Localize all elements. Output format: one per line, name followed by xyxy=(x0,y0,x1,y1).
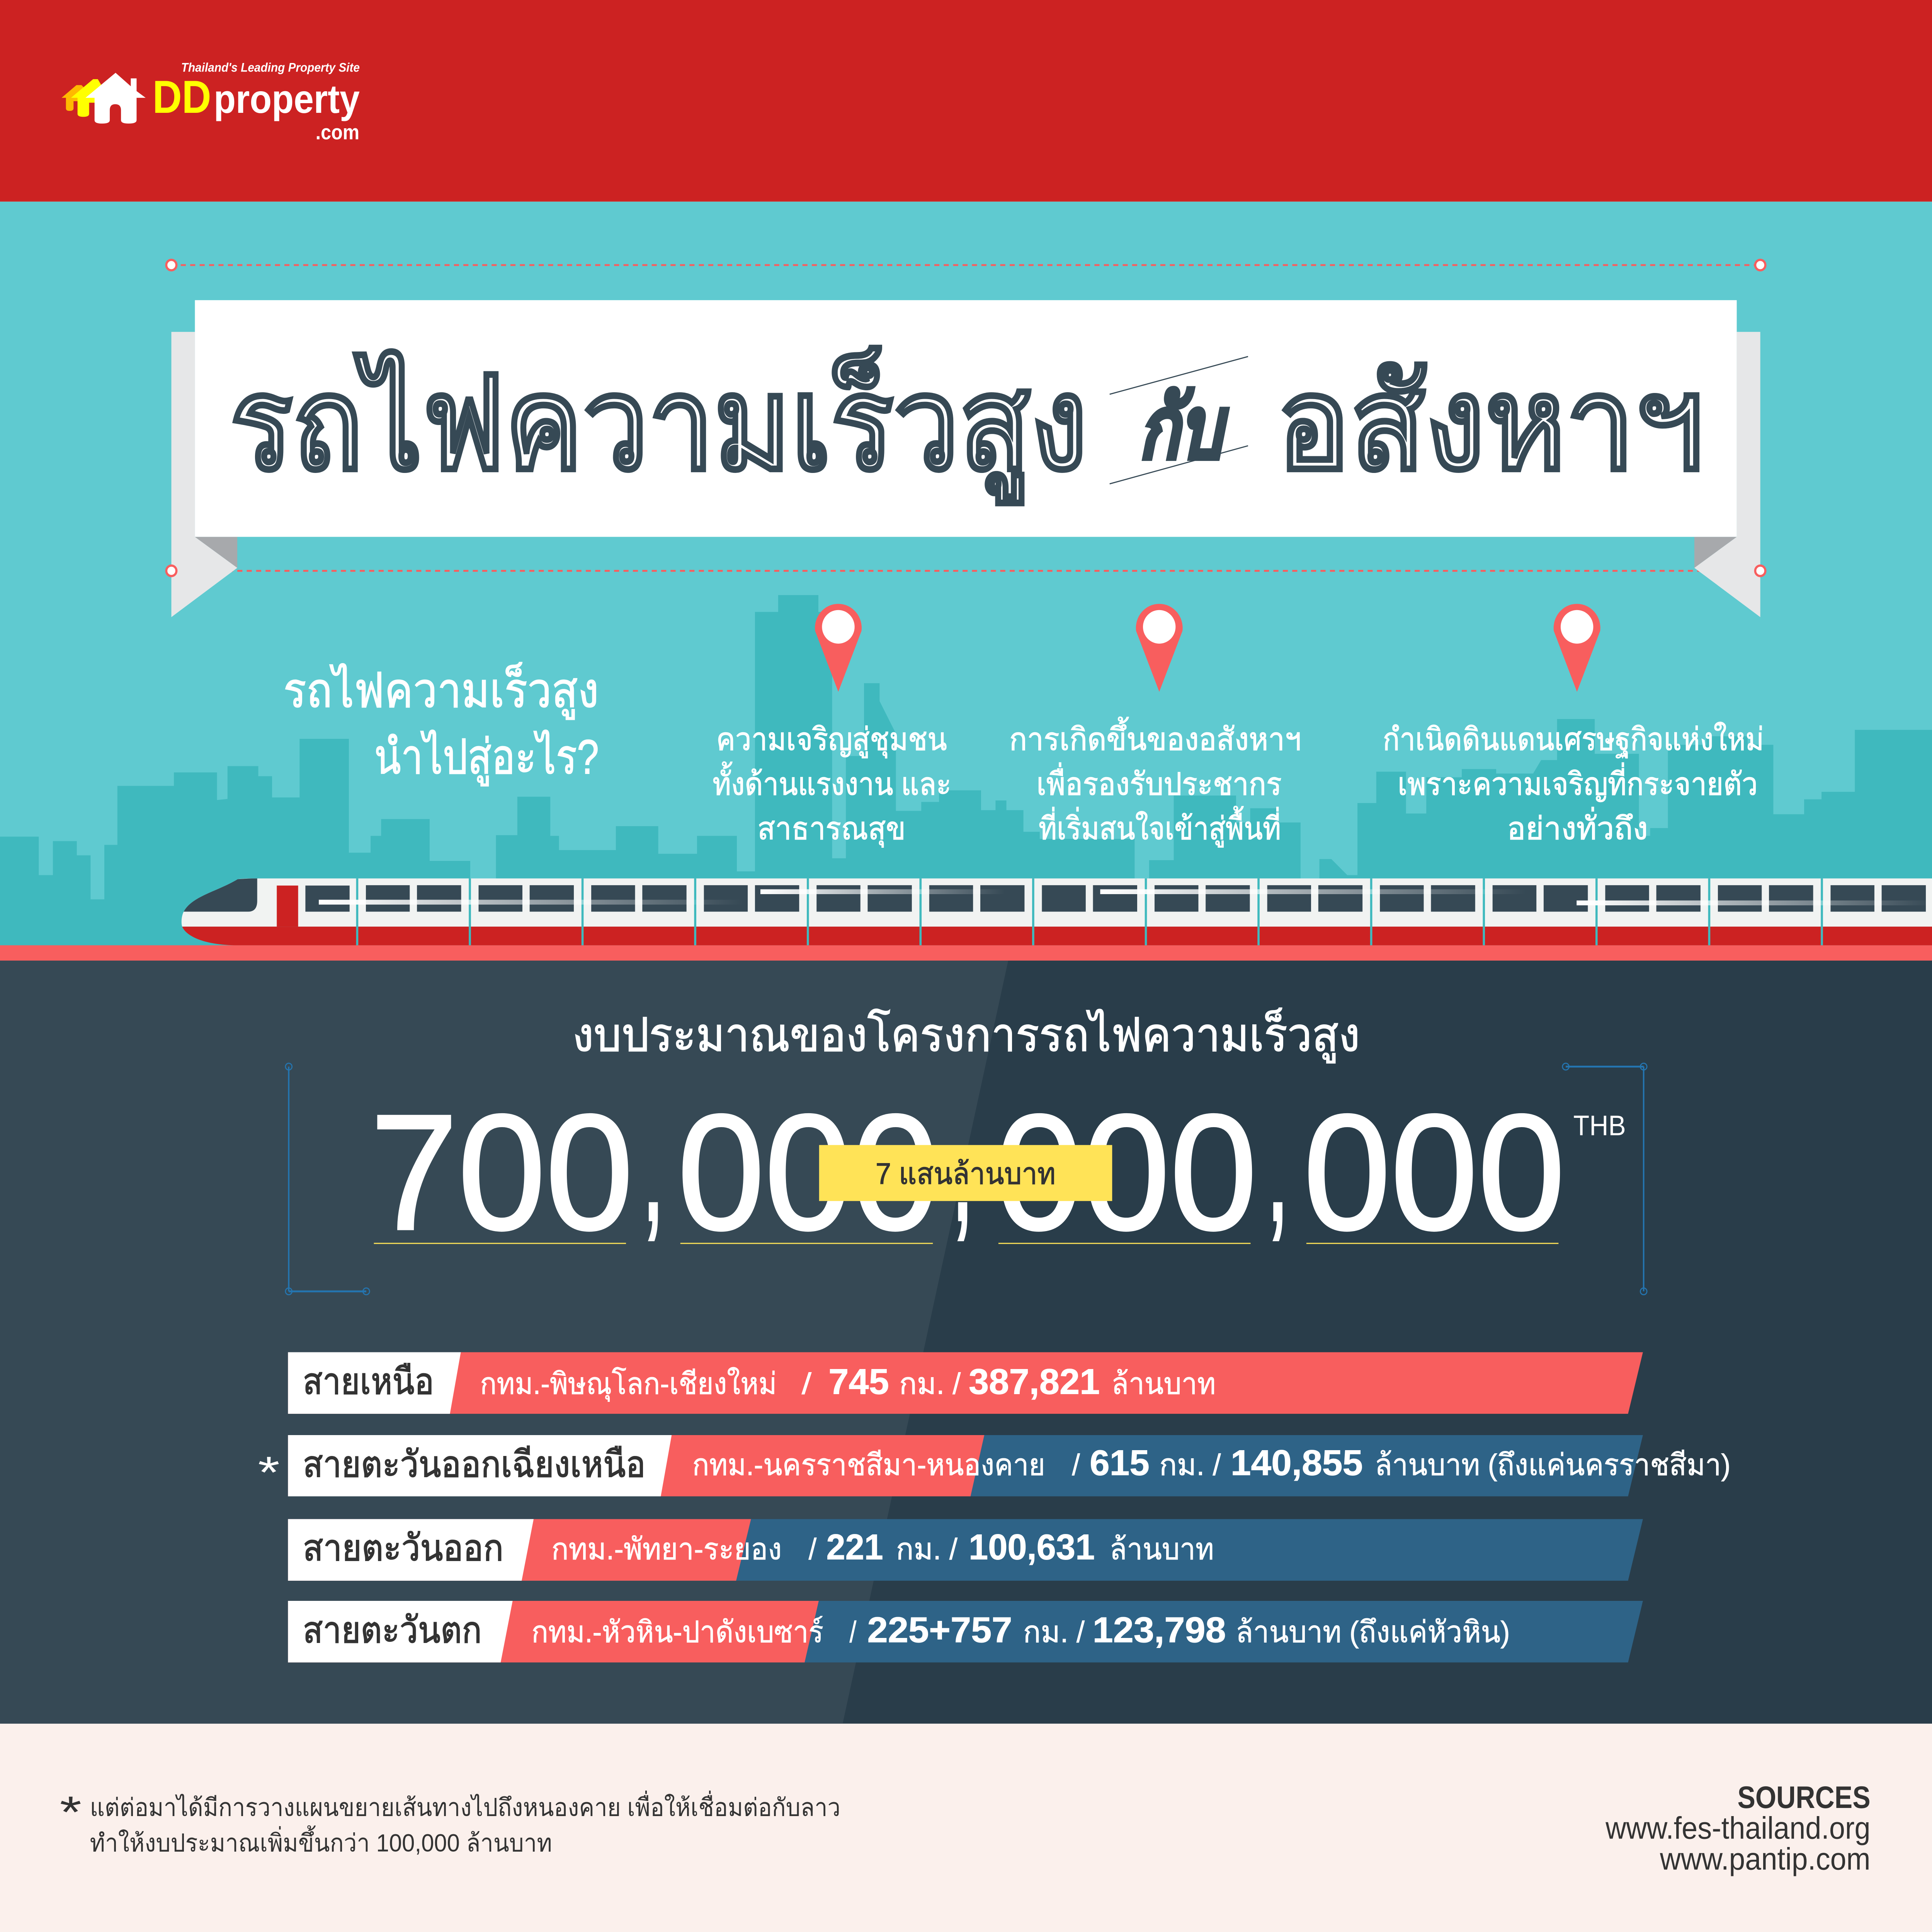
ribbon front xyxy=(195,300,1737,537)
big budget number: , xyxy=(951,1078,974,1253)
route row: west: กม. / xyxy=(1023,1616,1085,1649)
route row: west: สายตะวันตก xyxy=(303,1610,482,1651)
source 1: www.fes-thailand.org xyxy=(1605,1810,1871,1845)
train windscreen xyxy=(184,878,257,912)
big budget number: 000 xyxy=(995,1080,1257,1264)
text: benefit 2: ที่เริ่มสนใจเข้าสู่พื้นที่ xyxy=(1039,806,1281,847)
logo: DDproperty xyxy=(61,60,360,144)
route row: north: 745 xyxy=(828,1362,889,1402)
text: benefit 1 xyxy=(713,722,951,847)
footnote marker: * xyxy=(258,1448,280,1498)
logo .com: .com xyxy=(316,121,359,144)
ribbon right tail xyxy=(1694,332,1760,617)
train cab window xyxy=(305,886,350,912)
route row: east: กทม.-พัทยา-ระยอง xyxy=(551,1533,782,1566)
header band xyxy=(0,0,1932,202)
route row: north: ล้านบาท xyxy=(1111,1367,1216,1401)
icon: map pin 3 xyxy=(1554,604,1600,692)
route row: east: 100,631 xyxy=(969,1527,1095,1567)
train reflection streaks xyxy=(319,889,1932,905)
currency label: THB xyxy=(1573,1110,1626,1141)
text: benefit 2: การเกิดขึ้นของอสังหาฯ xyxy=(1009,717,1301,757)
route row: west: / xyxy=(850,1616,857,1649)
question line 2: นำไปสู่อะไร? xyxy=(374,730,599,786)
route row: east xyxy=(288,1519,1643,1581)
icon: orange house xyxy=(61,85,94,111)
route row: east: ล้านบาท xyxy=(1110,1533,1214,1566)
budget heading: งบประมาณของโครงการรถไฟความเร็วสูง xyxy=(572,1007,1360,1063)
big budget number: 000 xyxy=(677,1080,939,1264)
dashed guide end dots xyxy=(166,260,1765,576)
route row: east: / xyxy=(809,1533,817,1566)
route row: northeast: 140,855 xyxy=(1231,1443,1363,1483)
callout: 7 hundred thousand million xyxy=(819,1145,1112,1201)
route row: north: กม. / xyxy=(899,1367,961,1401)
text: benefit 3: อย่างทั่วถึง xyxy=(1507,807,1648,846)
teal background xyxy=(0,202,1932,946)
bracket top right xyxy=(1563,1063,1647,1295)
train white body xyxy=(182,878,1932,927)
route row: north xyxy=(288,1352,1643,1414)
city skyline xyxy=(0,595,1932,948)
budget panel light diagonal xyxy=(0,961,1008,1724)
title part 1: รถไฟความเร็วสูง xyxy=(230,344,1088,506)
route row: north: สายเหนือ xyxy=(303,1361,434,1402)
text: benefit 1: ความเจริญสู่ชุมชน xyxy=(716,722,947,758)
route row: northeast: / xyxy=(1072,1448,1080,1482)
big budget number: 000 xyxy=(1303,1080,1565,1264)
budget panel background xyxy=(0,961,1932,1724)
text: benefit 3: เพราะความเจริญที่กระจายตัว xyxy=(1398,763,1758,802)
icon: map pin 1 xyxy=(815,604,862,692)
footnote star: * xyxy=(60,1787,82,1837)
logo DD: DD xyxy=(153,71,211,123)
text: benefit 1: ทั้งด้านแรงงาน และ xyxy=(713,762,951,801)
route row: northeast: กม. / xyxy=(1159,1448,1221,1482)
route row: east: กม. / xyxy=(896,1533,958,1566)
route row: east: 221 xyxy=(827,1527,883,1567)
route row: northeast: สายตะวันออกเฉียงเหนือ xyxy=(303,1444,646,1485)
title part 2: อสังหาฯ xyxy=(1277,350,1704,497)
logo property: property xyxy=(214,76,360,121)
route row: north: 387,821 xyxy=(969,1362,1100,1402)
train red door stripe xyxy=(277,886,298,927)
ribbon banner xyxy=(171,300,1760,617)
big budget number: , xyxy=(1266,1078,1289,1253)
train car dividers xyxy=(357,878,1822,945)
sources heading: SOURCES xyxy=(1738,1780,1871,1815)
footnote line 1: แต่ต่อมาได้มีการวางแผนขยายเส้นทางไปถึงหนองคาย เพื่อให้เชื่อมต่อกับลาว xyxy=(90,1791,840,1821)
callout: 7 hundred thousand million: 7 แสนล้านบาท xyxy=(876,1157,1056,1190)
dashed guide lines xyxy=(171,265,1760,571)
text: benefit 2: เพื่อรองรับประชากร xyxy=(1036,763,1282,801)
footnote xyxy=(60,1787,840,1857)
route row: northeast: กทม.-นครราชสีมา-หนองคาย xyxy=(692,1448,1045,1482)
route row: north: / xyxy=(802,1367,812,1401)
question line 1: รถไฟความเร็วสูง xyxy=(283,662,599,719)
route row: northeast: ล้านบาท (ถึงแค่นครราชสีมา) xyxy=(1375,1448,1731,1482)
route row: west xyxy=(288,1601,1643,1662)
connector slash lines xyxy=(1110,357,1248,484)
icon: map pin 2 xyxy=(1136,604,1183,692)
train windows xyxy=(366,885,1926,912)
ribbon right fold xyxy=(1694,537,1737,568)
big budget number xyxy=(370,1078,1565,1264)
route row: east: สายตะวันออก xyxy=(303,1527,503,1568)
text: benefit 3 xyxy=(1383,721,1764,846)
source 2: www.pantip.com xyxy=(1660,1842,1871,1876)
route row: west: 123,798 xyxy=(1093,1610,1226,1650)
salmon track band xyxy=(0,945,1932,961)
footnote line 2: ทำให้งบประมาณเพิ่มขึ้นกว่า 100,000 ล้านบาท xyxy=(90,1825,552,1857)
text: benefit 3: กำเนิดดินแดนเศรษฐกิจแห่งใหม่ xyxy=(1383,721,1764,758)
ribbon left fold xyxy=(195,537,237,568)
train xyxy=(182,878,1932,945)
footer background xyxy=(0,1724,1932,1932)
route row: northeast xyxy=(288,1435,1731,1496)
bracket bottom left xyxy=(286,1063,369,1295)
big budget number: , xyxy=(641,1078,665,1253)
route row: west: 225+757 xyxy=(867,1610,1012,1650)
icon: yellow house xyxy=(71,79,109,117)
route row: west: กทม.-หัวหิน-ปาดังเบซาร์ xyxy=(531,1616,823,1649)
sources xyxy=(1605,1780,1871,1876)
logo tagline: Thailand's Leading Property Site xyxy=(181,60,360,75)
train red lower body xyxy=(182,927,1932,945)
icon: white house xyxy=(85,73,146,124)
big budget number: 700 xyxy=(370,1080,633,1264)
route row: north: กทม.-พิษณุโลก-เชียงใหม่ xyxy=(480,1367,777,1402)
title connector กับ: กับ xyxy=(1139,381,1228,476)
ribbon left tail xyxy=(171,332,237,617)
text: benefit 1: สาธารณสุข xyxy=(757,811,906,847)
number underlines xyxy=(374,1243,1558,1244)
question heading xyxy=(283,662,599,786)
text: benefit 2 xyxy=(1009,717,1301,847)
route row: west: ล้านบาท (ถึงแค่หัวหิน) xyxy=(1236,1616,1510,1649)
route row: northeast: 615 xyxy=(1090,1443,1150,1483)
